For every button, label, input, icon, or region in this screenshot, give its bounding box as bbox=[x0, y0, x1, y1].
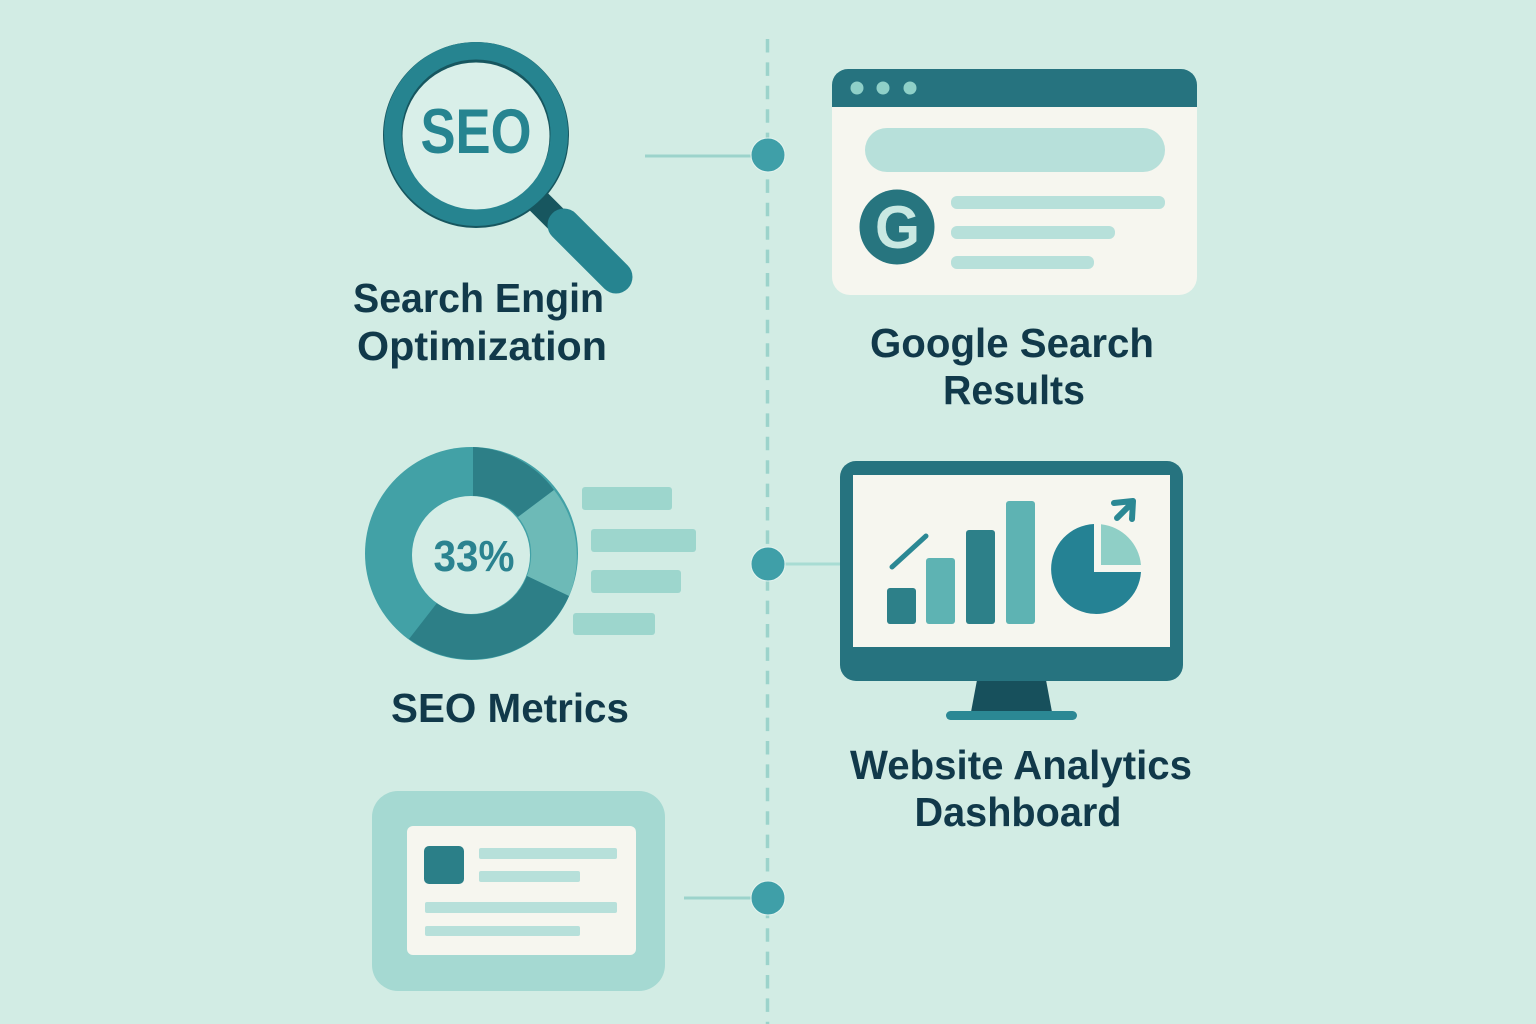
connector: card to timeline bbox=[684, 881, 785, 915]
chart: donut with 33% bbox=[365, 447, 578, 660]
heading: Website Analytics Dashboard: Dashboard bbox=[914, 789, 1122, 835]
panel: browser window bbox=[832, 69, 1197, 295]
heading: Google Search Results: Results bbox=[943, 367, 1085, 413]
heading: Search Engine Optimization bbox=[353, 275, 607, 369]
icon: analytics monitor bbox=[840, 461, 1183, 720]
icon: magnifying glass with SEO: SEO bbox=[420, 97, 532, 167]
icon: magnifying glass with SEO bbox=[383, 42, 616, 277]
heading: Google Search Results bbox=[870, 320, 1154, 413]
heading: SEO Metrics: SEO Metrics bbox=[391, 685, 629, 731]
heading: Website Analytics Dashboard bbox=[850, 742, 1192, 835]
chart: donut with 33%: 33% bbox=[434, 532, 514, 581]
panel: browser window: G bbox=[875, 194, 920, 261]
panel: content card bbox=[372, 791, 665, 991]
heading: Search Engine Optimization: Search Engin bbox=[353, 275, 604, 321]
heading: Website Analytics Dashboard: Website Analytics bbox=[850, 742, 1192, 788]
connector: metrics to timeline bbox=[751, 547, 842, 581]
chart legend bars bbox=[573, 487, 696, 635]
connector: SEO to timeline bbox=[645, 138, 785, 172]
heading: Google Search Results: Google Search bbox=[870, 320, 1154, 366]
heading: Search Engine Optimization: Optimization bbox=[357, 323, 607, 369]
